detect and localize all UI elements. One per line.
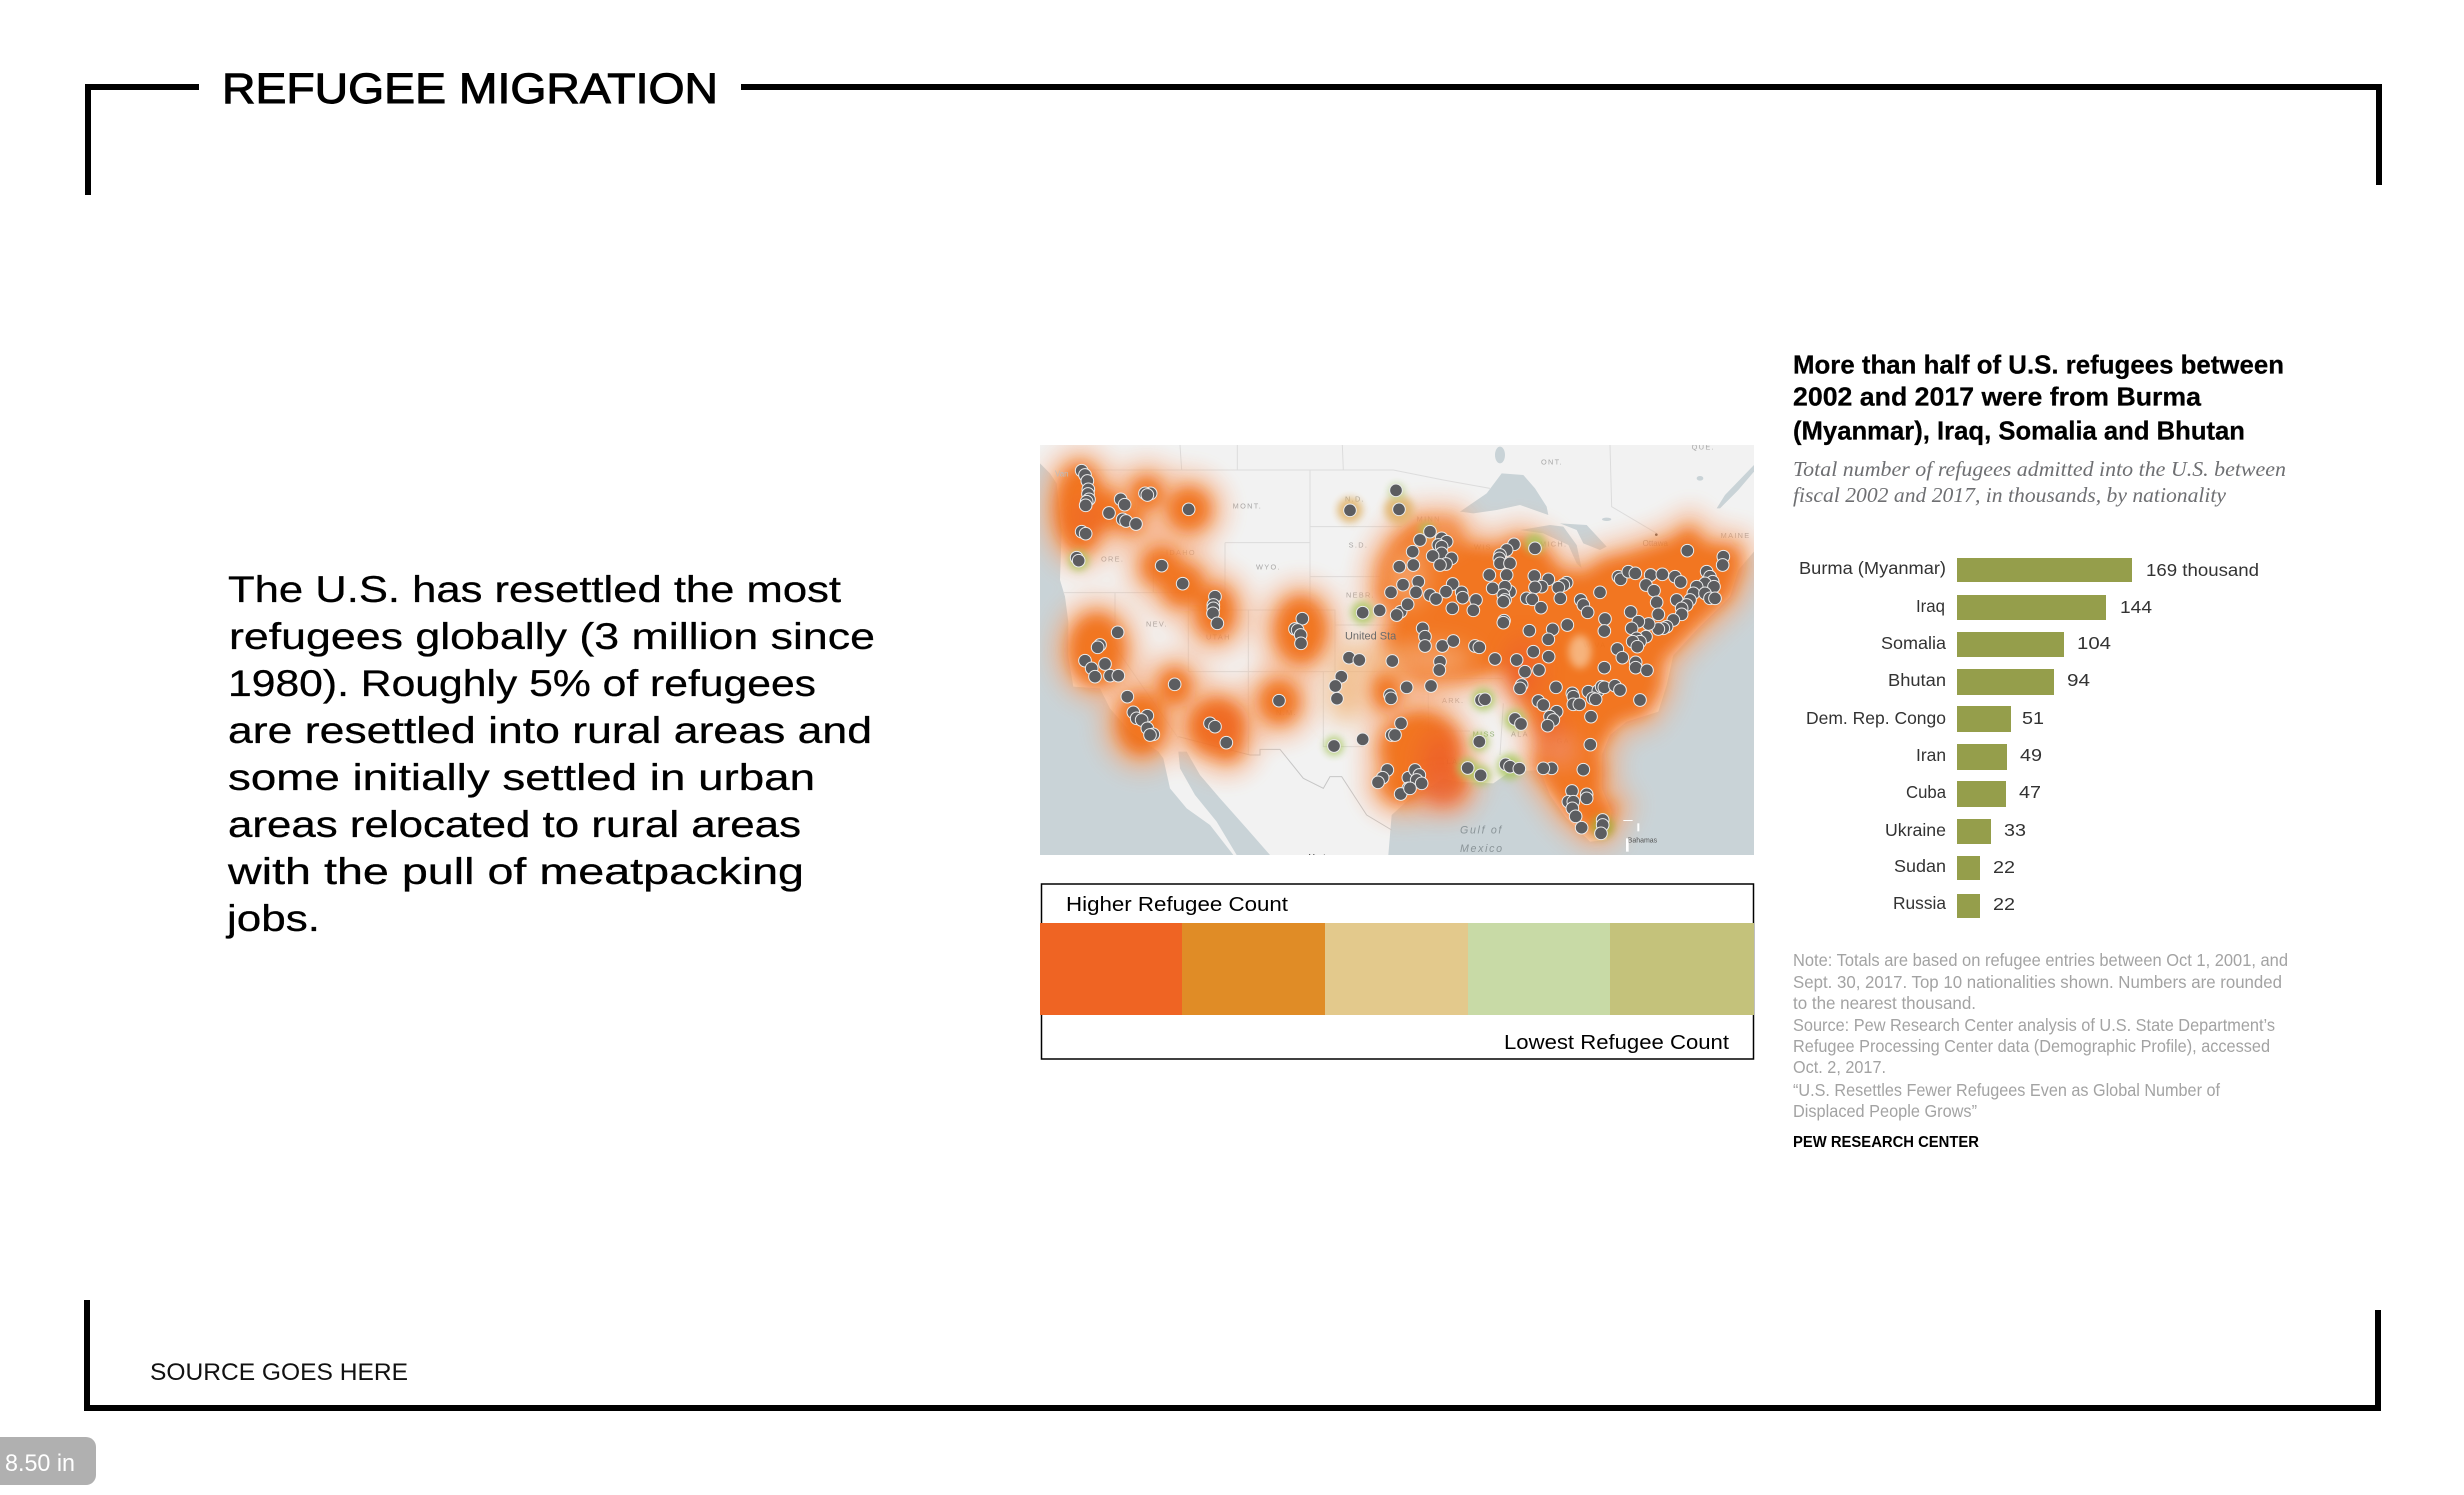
chart notes: Source: Pew Research Center analysis of U.S. State Department’s (1793, 1015, 2275, 1035)
map place labels: ARK. (1442, 696, 1464, 705)
body text block: jobs. (226, 898, 320, 939)
chart heading: More than half of U.S. refugees between (1793, 350, 2284, 380)
map place labels (1101, 445, 1749, 736)
chart credit: PEW RESEARCH CENTER (1793, 1134, 1979, 1151)
chart heading (1793, 350, 2284, 446)
bar values: 49 (2020, 745, 2042, 765)
title: REFUGEE MIGRATION (222, 65, 718, 113)
chart notes: “U.S. Resettles Fewer Refugees Even as Global Number of (1793, 1080, 2220, 1100)
map place labels: N.M. (1276, 708, 1297, 717)
bar values: 47 (2019, 782, 2041, 802)
country labels: Cuba (1906, 782, 1946, 802)
body text block: 1980). Roughly 5% of refugees (228, 663, 816, 704)
map place labels: W.VA (1583, 640, 1606, 649)
bar values: 22 (1993, 894, 2015, 914)
map place labels: S.D. (1349, 540, 1368, 549)
heat map of refugee resettlement: Mexico (1308, 853, 1334, 862)
chart notes: Oct. 2, 2017. (1793, 1057, 1886, 1077)
country labels: Bhutan (1888, 670, 1946, 690)
chart heading: (Myanmar), Iraq, Somalia and Bhutan (1793, 416, 2245, 446)
map place labels: MISS (1473, 729, 1496, 738)
country labels: Burma (Myanmar) (1799, 558, 1946, 578)
chart notes: Displaced People Grows” (1793, 1101, 1977, 1121)
pale orange clusters (1337, 484, 1414, 524)
chart subtitle: Total number of refugees admitted into the U.S. between (1793, 457, 2286, 481)
body text block: refugees globally (3 million since (229, 616, 875, 657)
body text block: are resettled into rural areas and (228, 710, 872, 751)
map place labels: MICH. (1540, 539, 1567, 548)
map place labels: MINN (1417, 514, 1441, 523)
country labels: Russia (1893, 893, 1946, 913)
map place labels: IDAHO (1166, 548, 1196, 557)
heat layers (1055, 463, 1742, 838)
country labels: Somalia (1881, 633, 1946, 653)
map place labels: Ottawa (1643, 539, 1669, 548)
map place labels: NEBR. (1346, 591, 1375, 600)
body text block: The U.S. has resettled the most (228, 569, 842, 610)
faint labels above heat: United Sta (1345, 630, 1397, 642)
map place labels: WYO. (1256, 563, 1281, 572)
great lakes (1460, 447, 1754, 568)
chart notes: to the nearest thousand. (1793, 993, 1976, 1013)
map place labels: LA. (1447, 757, 1462, 766)
green halo outliers (1069, 523, 1614, 838)
bar values: 51 (2022, 708, 2044, 728)
heat map of refugee resettlement: Bahamas (1628, 838, 1658, 845)
bottom frame bracket (84, 1300, 2381, 1411)
heat map of refugee resettlement: Gulf of (1460, 824, 1503, 836)
state and national borders (1063, 445, 1657, 755)
map place labels: ALA (1511, 730, 1529, 739)
map place labels: ONT. (1541, 458, 1563, 467)
chart notes: Sept. 30, 2017. Top 10 nationalities shown. Numbers are rounded (1793, 972, 2282, 992)
legend low label: Lowest Refugee Count (1504, 1032, 1729, 1054)
north east dots (1406, 525, 1730, 658)
chart subtitle: fiscal 2002 and 2017, in thousands, by nationality (1793, 483, 2227, 507)
source line: SOURCE GOES HERE (150, 1359, 408, 1386)
map place labels: MAINE (1721, 531, 1751, 540)
country labels: Iraq (1916, 596, 1945, 616)
south east dots (1404, 650, 1653, 840)
country labels: Sudan (1894, 856, 1946, 876)
map place labels: MONT. (1233, 502, 1262, 511)
map place labels: ORE. (1101, 555, 1124, 564)
bar values: 104 (2077, 633, 2111, 653)
legend (1040, 884, 1754, 1059)
legend swatches (1040, 923, 1754, 1015)
chart notes: Refugee Processing Center data (Demographic Profile), accessed (1793, 1036, 2270, 1056)
map place labels: UTAH (1206, 632, 1231, 641)
country labels: Dem. Rep. Congo (1806, 708, 1946, 728)
pale gap (1569, 635, 1591, 668)
country labels: Ukraine (1885, 820, 1946, 840)
top frame bracket (85, 84, 2382, 195)
heat map of refugee resettlement: Van (1055, 470, 1069, 479)
bar values: 144 (2120, 597, 2152, 617)
pale orange around southern plains dots (1327, 644, 1400, 723)
north west dots (1070, 464, 1414, 654)
chart heading: 2002 and 2017 were from Burma (1793, 382, 2202, 412)
pale central plains wash (1387, 520, 1473, 677)
bar values: 94 (2067, 670, 2090, 690)
country labels (1799, 558, 1946, 913)
map place labels: QUE. (1692, 442, 1715, 451)
ruler badge (0, 1437, 96, 1485)
bar values: 33 (2004, 820, 2026, 840)
heat map of refugee resettlement: Mexico (1460, 843, 1504, 855)
chart notes (1793, 950, 2288, 1121)
bar chart (1799, 558, 2259, 918)
map place labels: WIS (1474, 542, 1492, 551)
map place labels: N.D. (1345, 495, 1365, 504)
body text block: with the pull of meatpacking (227, 851, 804, 892)
south west dots (1079, 651, 1415, 800)
bars (1957, 558, 2132, 918)
country labels: Iran (1916, 745, 1946, 765)
legend high label: Higher Refugee Count (1066, 894, 1288, 916)
location dots (1070, 464, 1730, 840)
body text block: areas relocated to rural areas (228, 804, 801, 845)
body text block: some initially settled in urban (228, 757, 815, 798)
chart notes: Note: Totals are based on refugee entries between Oct 1, 2001, and (1793, 950, 2288, 970)
red hot cores (1073, 503, 1563, 797)
chart subtitle (1793, 457, 2286, 507)
body text block (226, 569, 875, 939)
heat map of refugee resettlement (1040, 442, 1754, 862)
map place labels: NEV. (1146, 620, 1168, 629)
bar values: 169 thousand (2146, 560, 2259, 580)
map place labels: GA (1557, 737, 1570, 746)
bar values (1993, 560, 2259, 914)
ruler badge: 8.50 in (5, 1450, 75, 1477)
bar values: 22 (1993, 857, 2015, 877)
